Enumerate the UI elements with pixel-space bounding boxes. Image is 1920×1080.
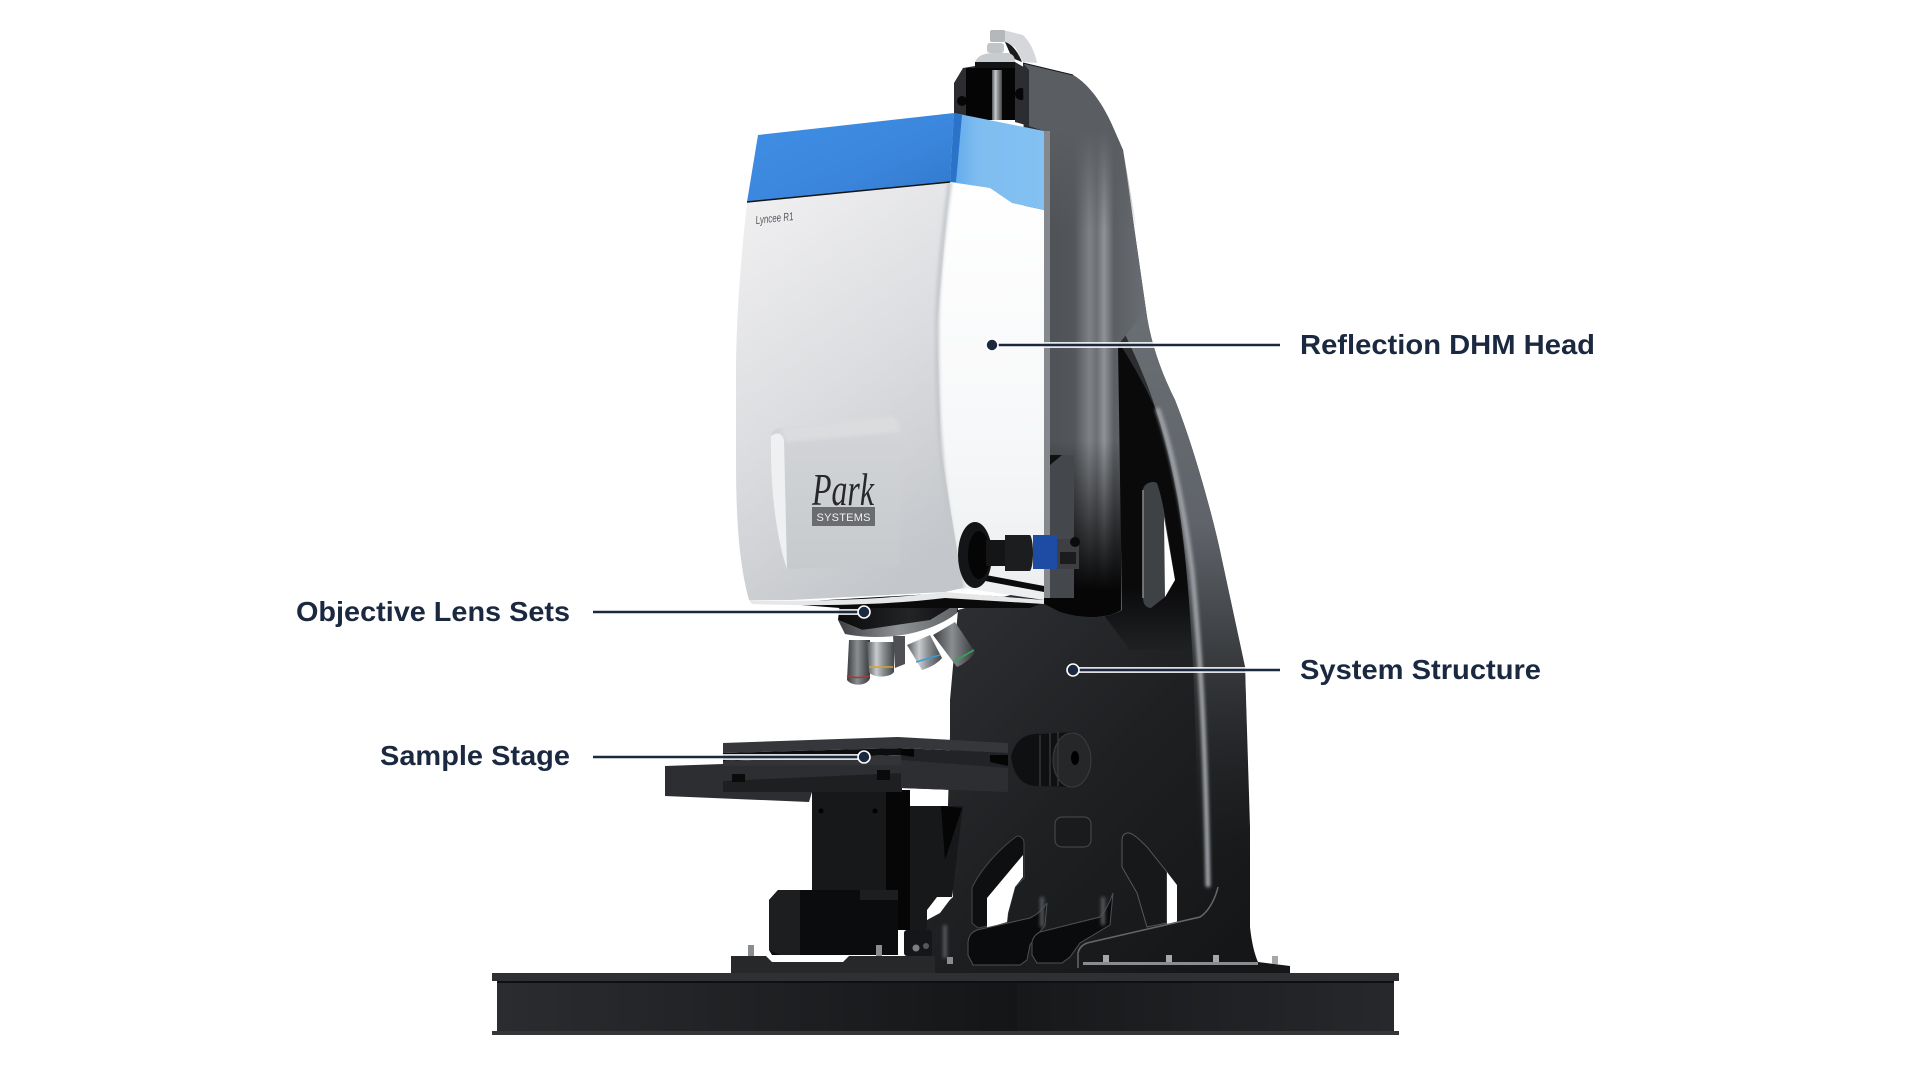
Systems badge: SYSTEMS <box>816 512 870 524</box>
upper back column <box>1023 63 1146 617</box>
recessed logo panel <box>771 416 900 569</box>
objective: rear <box>893 636 905 668</box>
callout: Reflection DHM Head: Reflection DHM Head <box>1300 329 1595 360</box>
system illustration <box>492 30 1399 1035</box>
system structure frame <box>927 63 1290 973</box>
stage knob <box>1011 732 1091 787</box>
Systems badge <box>812 507 875 526</box>
callout: System Structure: System Structure <box>1300 654 1541 685</box>
sample stage assembly <box>665 732 1091 973</box>
right mounting plate with bolts <box>1083 955 1278 965</box>
callout: System Structure <box>1067 654 1541 685</box>
callout: Objective Lens Sets: Objective Lens Sets <box>296 596 570 627</box>
upper stage plate <box>723 737 1008 753</box>
frame silhouette <box>927 63 1290 973</box>
turret ring <box>838 603 958 637</box>
feet ribs <box>945 887 1218 968</box>
black recess <box>1100 335 1192 650</box>
callout: Objective Lens Sets <box>296 596 870 627</box>
objective: red band <box>847 640 870 685</box>
black gap below camera <box>980 575 1044 592</box>
outer rib <box>1118 310 1250 860</box>
rib highlight <box>1158 410 1208 885</box>
callout: Sample Stage: Sample Stage <box>380 740 570 771</box>
reflection DHM head <box>736 113 1080 608</box>
Park logo: Park <box>811 464 875 515</box>
callout: Reflection DHM Head <box>986 329 1595 360</box>
objective: green band <box>933 622 975 667</box>
model name: Lyncee R1 <box>755 211 794 227</box>
objective: blue band <box>907 635 942 670</box>
corner seam highlight <box>937 182 963 588</box>
objective lens turret <box>838 602 975 685</box>
bracket <box>1050 455 1074 598</box>
objective: yellow band <box>867 642 894 676</box>
callout: Sample Stage <box>380 740 870 771</box>
stage lower support <box>731 790 963 973</box>
body left face <box>736 182 963 600</box>
bottom edge <box>749 592 1044 605</box>
side strip <box>1044 131 1050 598</box>
optical table base <box>492 973 1399 1035</box>
under shadow <box>775 593 1050 608</box>
top adjuster assembly <box>954 30 1037 126</box>
blue cap right <box>950 113 1044 210</box>
lower cutouts <box>927 817 1177 928</box>
side camera <box>958 522 1080 588</box>
window slot <box>1143 482 1175 608</box>
lower stage plate <box>665 757 902 802</box>
body right face <box>937 182 1044 600</box>
turret dome <box>838 602 958 630</box>
blue cap left <box>747 113 954 202</box>
